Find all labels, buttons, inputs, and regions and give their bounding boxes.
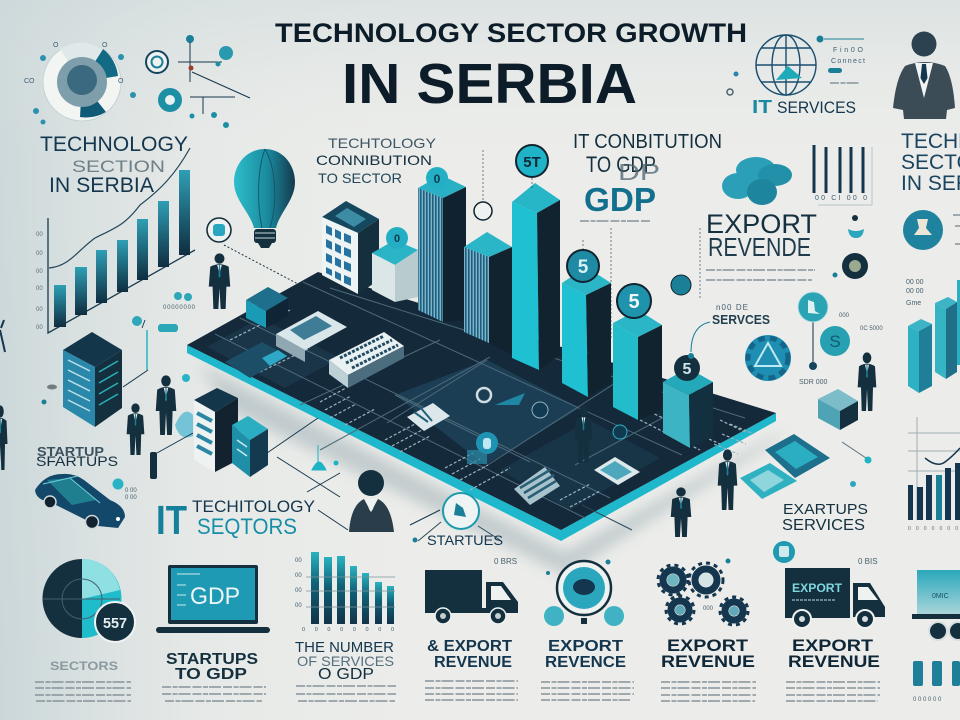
pins: value markers [386,145,700,381]
bar: teal five [663,368,713,448]
icon: segmented pie globe [24,42,136,124]
label: technology contribution to sector: TECHTOLOGY [328,135,437,151]
right 3D bars: 00 00 [906,279,924,286]
icon: globe [756,35,816,95]
pins: value markers: 5T [523,154,541,171]
label: exartups services [782,501,868,534]
column: export truck [773,541,885,701]
growth bar chart [36,148,195,333]
label: IT services: SERVICES [777,98,856,117]
label: services: n00 DE [716,303,748,312]
column: gears export revenue: REVENUE [661,652,755,671]
server racks [150,388,340,497]
icon and label: startues [412,493,632,548]
title: IN SERBIA [342,52,637,116]
title: TECHNOLOGY SECTOR GROWTH [275,18,747,48]
column: number of services chart: THE NUMBER [295,639,394,656]
pins: value markers: 0 [434,172,441,186]
icon: barcode chart [814,145,872,205]
icon and label: startues: STARTUES [427,532,503,548]
column: circular icon export revenue: EXPORT [548,638,623,655]
growth bar chart: 00 [36,325,43,331]
icon: blue cube cluster [722,157,792,205]
pins: value markers: 5 [578,257,589,278]
column: gears export revenue: 000 [703,606,714,612]
building and persons left [0,330,176,470]
icons: teal medallions [798,292,883,386]
icons: teal medallions: SDR 000 [799,379,828,386]
label: IT contribution to GDP: DP [618,159,660,185]
column: partial teal truck and mini bars: 0 0 0 0 0 0 [913,697,942,703]
growth bar chart: 00 [36,269,43,275]
column: gears export revenue [658,558,756,701]
icon: bowl and medallion [832,215,868,279]
label: IT technology sectors [156,497,315,543]
label: technology contribution to sector: TO SECTOR [318,170,402,186]
column: laptop GDP: TO GDP [175,666,247,683]
column: circular icon export revenue: REVENCE [545,654,626,671]
label: IT technology sectors: SEQTORS [197,514,297,539]
column: number of services chart: O GDP [318,666,374,683]
pins: value markers: 5 [628,291,640,313]
column: export truck: 0 BIS [858,557,878,566]
platform small panel [225,342,288,378]
label: IT contribution to GDP: GDP [584,181,656,218]
label: exartups services: SERVICES [782,517,865,534]
label: startups [36,444,118,469]
column: number of services chart: 0 0 0 0 0 0 0 0 [302,627,394,633]
label: IT services: IT [752,97,772,117]
title [275,18,747,116]
label: IT contribution to GDP: IT CONBITUTION [573,131,722,153]
label: export revenue: EXPORT [706,209,817,239]
legend: small globe notes: Connect [831,58,865,65]
column: export truck: EXPORT [792,636,874,655]
column: sectors pie [35,559,135,701]
label: services: SERVCES [712,313,770,327]
growth bar chart: 00 [36,251,43,257]
line and bar chart right: 0 0 0 0 0 0 0 [908,526,958,532]
label: technology contribution to sector [316,135,437,186]
icons: teal medallions: 000 [839,313,850,319]
icon: teal light bulb [234,149,295,248]
column: truck and export revenue [425,557,518,700]
icon: barcode chart: 00 CI 00 0 [815,195,867,202]
platform server box [246,287,288,328]
icons: teal cards right [740,434,872,499]
growth bar chart: 00 [36,286,43,292]
isometric building [322,201,379,294]
icon: small badge and person [207,218,300,309]
label: export revenue: REVENDE [708,232,811,262]
platform central items [407,388,640,505]
column: laptop GDP: GDP [190,583,240,610]
bar: striped tower [418,175,466,322]
icon: big bust [318,470,440,532]
label: startups: SFARTUPS [36,453,118,469]
label: exartups services: EXARTUPS [783,501,868,518]
label: technology contribution to sector: CONNIBUTION [316,152,432,168]
column: laptop GDP [156,565,270,701]
icon: gear network [745,335,791,381]
right 3D bars [906,279,960,393]
icon: segmented pie globe: O [53,42,59,49]
label: IT contribution to GDP [573,131,722,221]
column: number of services chart: OF SERVICES [297,653,394,669]
platform card and device [276,311,404,388]
legend: small globe notes: Fin0O [833,47,864,54]
persons near platform right [671,449,737,537]
column: sectors pie: 557 [103,615,127,632]
label: services [688,303,770,359]
icon cluster: network nodes [146,35,250,128]
pins: value markers: 5 [683,361,692,378]
bar: tall teal [512,183,560,370]
heading: technology section in Serbia [40,133,188,197]
right 3D bars: Gme [906,300,921,307]
icon: segmented pie globe: CO [24,78,35,85]
column: partial teal truck and mini bars [912,570,960,703]
line and bar chart right [908,417,960,532]
column: laptop GDP: STARTUPS [166,651,258,668]
platform shadow [200,365,785,575]
column: partial teal truck and mini bars: 0MIC [932,593,949,600]
label: IT services [752,97,856,117]
icon: teal badge with note [903,210,960,250]
person and parcel box right [818,352,876,430]
column: number of services chart: 00 [295,603,302,609]
bar: pale block [372,240,418,302]
column: number of services chart: 00 [295,558,302,564]
icon: segmented pie globe: O [118,78,124,85]
label: tech sector in Serbia, cut off [901,130,960,195]
icons: teal medallions: S [829,332,841,351]
icon: top right business person [893,32,955,119]
column: truck and export revenue: 0 BRS [494,557,517,566]
icon: car [35,474,137,528]
label: IT technology sectors: TECHITOLOGY [192,497,315,516]
label: IT contribution to GDP: TO GDP [586,152,656,177]
heading: technology section in Serbia: IN SERBIA [49,174,154,197]
left scattered marks: 00000000 [163,305,196,311]
icons: teal medallions: 0C 5000 [860,326,883,332]
bar: teal three [562,267,611,397]
right 3D bars: 00 00 [906,288,924,295]
heading: technology section in Serbia: TECHNOLOGY [40,133,188,156]
bar: teal four [613,310,662,420]
legend: small globe notes [727,36,865,95]
column: truck and export revenue: REVENUE [434,654,512,671]
column: export truck: EXPORT [792,581,843,595]
column: number of services chart [295,552,396,701]
column: export truck: REVENUE [788,652,880,671]
label: startups: STARTUP [37,444,104,459]
column: number of services chart: 00 [295,588,302,594]
bar: striped tower two [464,232,512,355]
icon: segmented pie globe: O [102,42,108,49]
left scattered marks [0,292,196,404]
heading: technology section in Serbia: SECTION [72,157,165,176]
pins: value markers: 0 [394,233,400,245]
column: truck and export revenue: & EXPORT [427,638,512,655]
isometric platform [187,272,776,541]
column: sectors pie: SECTORS [50,659,118,673]
person on platform [575,405,592,463]
icon: car: 0 00 [125,495,137,501]
column: circular icon export revenue [541,560,634,700]
icon: car: 0 00 [125,488,137,494]
growth bar chart: 00 [36,232,43,238]
column: gears export revenue: EXPORT [667,636,749,655]
column: number of services chart: 00 [295,573,302,579]
label: IT technology sectors: IT [156,497,187,543]
label: export revenue [706,209,817,280]
growth bar chart: 00 [36,307,43,313]
